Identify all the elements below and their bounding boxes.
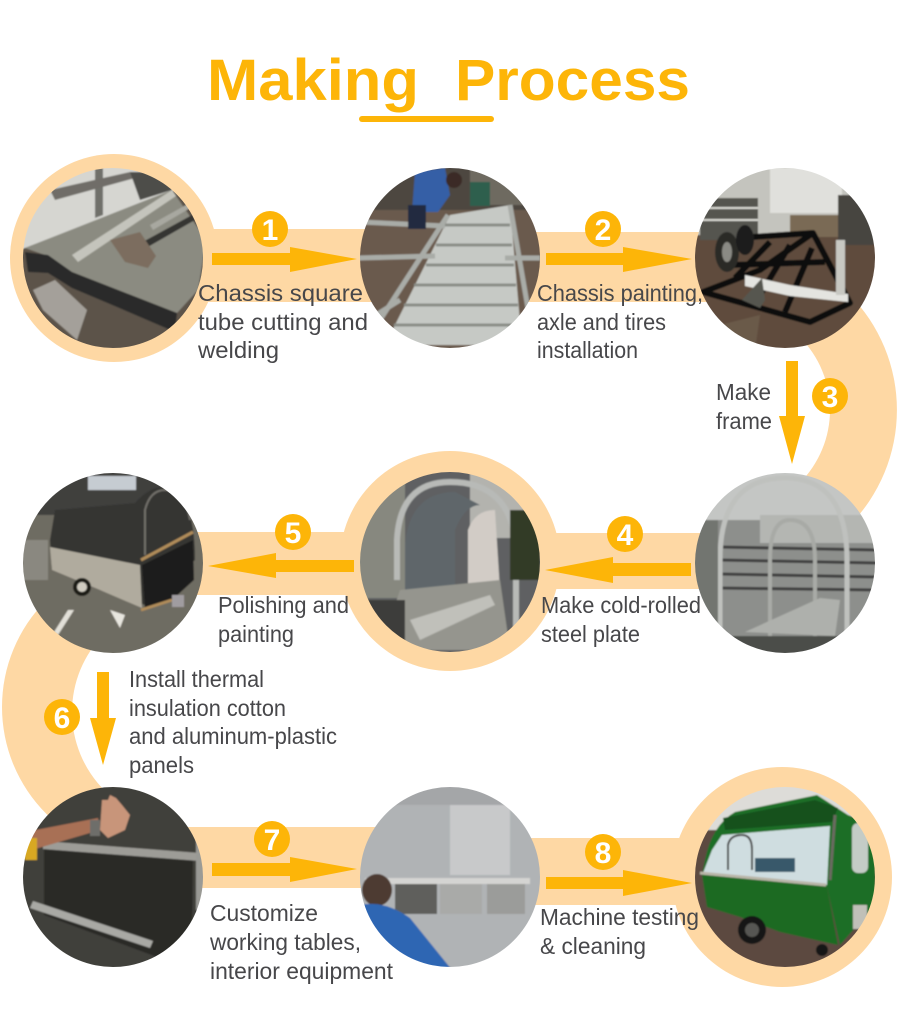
arrow 3 — [779, 361, 805, 464]
step badge 5: 5 — [285, 517, 301, 550]
label step 4: Make cold-rolled — [541, 592, 701, 618]
label step 8: Machine testing — [540, 904, 699, 930]
label step 7: Customize — [210, 900, 318, 926]
label step 5: Polishing and — [218, 592, 349, 618]
photo 8: stainless sinks — [360, 787, 540, 967]
step badge 1: 1 — [262, 214, 278, 247]
label step 2 — [537, 280, 703, 363]
label step 6: Install thermal — [129, 666, 264, 692]
label step 7 — [209, 900, 394, 984]
step badge 3: 3 — [822, 381, 838, 414]
photo 5: cold rolled steel plate — [360, 472, 540, 652]
label step 6: and aluminum-plastic — [129, 723, 337, 749]
label step 1: tube cutting and — [198, 309, 368, 335]
label step 2: installation — [537, 337, 638, 363]
label step 3 — [716, 379, 772, 434]
photo 1: square tubes — [23, 168, 203, 348]
arrow 7 — [212, 857, 357, 882]
arrow 8 — [546, 870, 692, 896]
arrow 6 — [90, 672, 116, 765]
label step 1: welding — [197, 337, 279, 363]
step badge 6: 6 — [54, 702, 70, 735]
label step 5 — [218, 592, 349, 647]
arrow 2 — [546, 247, 692, 272]
title: Making — [207, 48, 419, 113]
step badge 8: 8 — [595, 837, 611, 870]
step badge 1 — [252, 211, 288, 247]
label step 1: Chassis square — [198, 280, 363, 306]
arrow 4 — [545, 557, 691, 583]
photo 9: green food trailer — [695, 787, 875, 967]
label step 6: panels — [129, 752, 194, 778]
photo 4: steel frame arch — [695, 473, 875, 653]
arrow 5 — [208, 553, 354, 578]
step badge 2 — [585, 211, 621, 247]
label step 1 — [197, 280, 368, 363]
label step 4: steel plate — [541, 621, 640, 647]
label step 2: Chassis painting, — [537, 280, 703, 306]
photo 7: insulation panels — [23, 787, 203, 967]
label step 4 — [541, 592, 701, 647]
label step 7: working tables, — [209, 929, 361, 955]
step badge 4: 4 — [617, 519, 634, 552]
step badge 8 — [585, 834, 621, 870]
step badge 2: 2 — [595, 214, 611, 247]
label step 8 — [540, 904, 699, 959]
photo 6: polished trailer — [23, 473, 203, 653]
title: Process — [455, 48, 690, 113]
label step 6 — [129, 666, 337, 778]
label step 5: painting — [218, 621, 294, 647]
step badge 6 — [44, 699, 80, 735]
step badge 7: 7 — [264, 824, 280, 857]
label step 7: interior equipment — [210, 958, 394, 984]
photo 2: chassis welding — [360, 168, 540, 348]
label step 2: axle and tires — [537, 309, 666, 335]
arrow 1 — [212, 247, 357, 272]
label step 3: frame — [716, 408, 772, 434]
label step 3: Make — [716, 379, 771, 405]
step badge 5 — [275, 514, 311, 550]
step badge 3 — [812, 378, 848, 414]
step badge 4 — [607, 516, 643, 552]
label step 6: insulation cotton — [129, 695, 286, 721]
title — [207, 48, 690, 122]
photo 3: painted chassis with wheels — [695, 168, 875, 348]
label step 8: & cleaning — [540, 933, 646, 959]
step badge 7 — [254, 821, 290, 857]
